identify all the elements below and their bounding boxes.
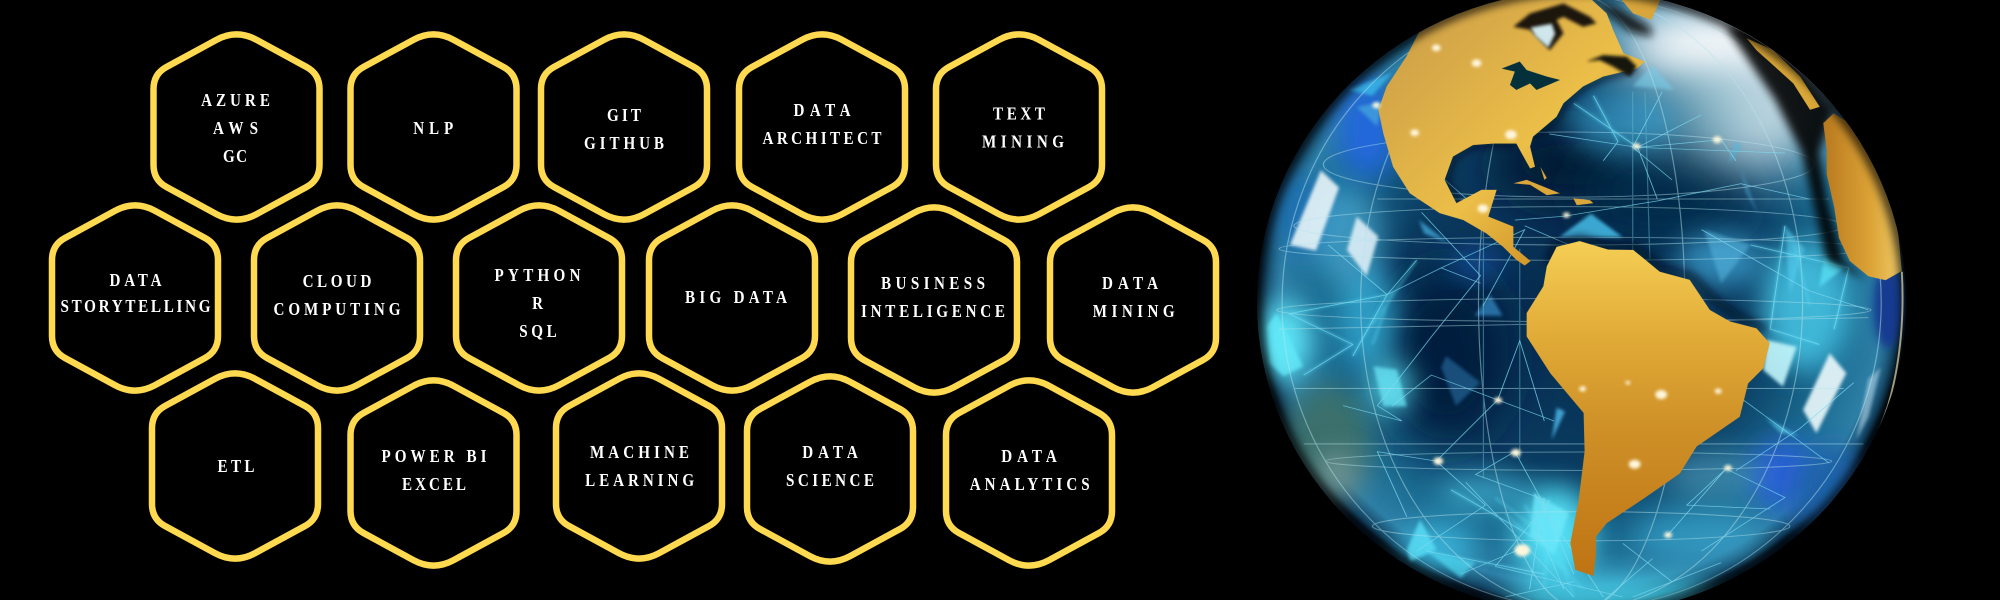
Caribbean islands [1513, 167, 1593, 205]
hexagon: Data Analytics: DATA [1001, 446, 1057, 466]
hexagon: Azure AWS GC: AWS [213, 118, 258, 138]
hexagon: Data Storytelling [52, 205, 218, 391]
hexagon: Python R SQL: R [532, 293, 544, 313]
translucent polygon shards [1267, 65, 1881, 578]
hexagon: Data Mining: MINING [1093, 301, 1175, 321]
hexagon: ETL: ETL [218, 456, 254, 476]
hexagon: Business Inteligence [851, 207, 1017, 393]
hexagon: Power BI Excel: POWER BI [382, 446, 487, 466]
hexagon: Business Inteligence: INTELIGENCE [861, 301, 1005, 321]
hexagon: Data Analytics [946, 380, 1112, 566]
illustration: golden globe with data network [1257, 0, 1906, 600]
sphere dark edge vignette [1257, 0, 1906, 600]
Americas coast shadow [1445, 69, 1765, 330]
hexagon: Azure AWS GC: AZURE [201, 90, 270, 110]
Great Lakes [1502, 62, 1560, 90]
continent: Africa [1823, 113, 1902, 280]
hexagon: Data Architect [739, 34, 905, 220]
hexagon: ETL [152, 373, 318, 559]
hexagon: Data Mining: DATA [1102, 273, 1158, 293]
Greenland shadow [1587, 0, 1652, 37]
Gulf of St Lawrence [1587, 55, 1637, 77]
continent: Europe fragment [1747, 38, 1820, 110]
hexagon: Business Inteligence: BUSINESS [881, 273, 985, 293]
hexagon: Big Data: BIG DATA [685, 287, 787, 307]
network link lines [1289, 92, 1868, 600]
hexagon: Data Architect: ARCHITECT [762, 128, 882, 148]
hexagon: Power BI Excel [350, 380, 516, 566]
latitude and longitude grid [1277, 0, 1881, 600]
continent: North America [1378, 0, 1645, 266]
hexagon: Azure AWS GC [154, 34, 320, 220]
glow patches on the sphere [1257, 4, 1903, 600]
hexagon: Machine Learning: MACHINE [590, 442, 689, 462]
hexagon: NLP: NLP [413, 118, 453, 138]
hexagon: Cloud Computing: COMPUTING [273, 299, 401, 319]
hexagon: Data Analytics: ANALYTICS [970, 474, 1090, 494]
panel: hexagon grid [52, 34, 1216, 566]
hexagon: Python R SQL [456, 205, 622, 391]
right rim highlight [1878, 271, 1904, 428]
globe base sphere [1257, 0, 1906, 600]
hexagon: Text Mining: MINING [982, 131, 1064, 152]
hexagon: Data Science: SCIENCE [786, 470, 874, 490]
hexagon: Text Mining [936, 34, 1102, 220]
hexagon: NLP [350, 34, 516, 220]
hexagon: Data Mining [1050, 207, 1216, 393]
network link lines glow [1289, 96, 1849, 597]
Africa and Europe shadow [1726, 27, 1866, 279]
hexagon: Machine Learning: LEARNING [585, 470, 694, 490]
hexagon: Cloud Computing [254, 205, 420, 391]
continent: South America [1527, 241, 1770, 576]
hexagon: Text Mining: TEXT [993, 103, 1045, 124]
hexagon: Data Architect: DATA [793, 100, 851, 120]
hexagon: Data Storytelling: STORYTELLING [60, 296, 211, 316]
hexagon: Data Science: DATA [802, 442, 858, 462]
hexagon: Data Science [747, 376, 913, 562]
city light dots [1372, 44, 1732, 556]
hexagon: Git GitHub: GITHUB [584, 133, 664, 153]
hexagon: Azure AWS GC: GC [223, 146, 247, 166]
hexagon: Git GitHub [541, 34, 707, 220]
continent: Greenland [1620, 0, 1661, 20]
hexagon: Machine Learning [556, 373, 722, 559]
hexagon: Cloud Computing: CLOUD [303, 271, 371, 291]
hexagon: Power BI Excel: EXCEL [402, 474, 466, 494]
hexagon: Git GitHub: GIT [607, 105, 641, 125]
hexagon: Data Storytelling: DATA [110, 270, 161, 290]
hexagon: Python R SQL: SQL [519, 321, 557, 341]
Hudson Bay [1513, 3, 1596, 50]
hexagon: Python R SQL: PYTHON [494, 265, 581, 285]
hexagon: Big Data [649, 205, 815, 391]
